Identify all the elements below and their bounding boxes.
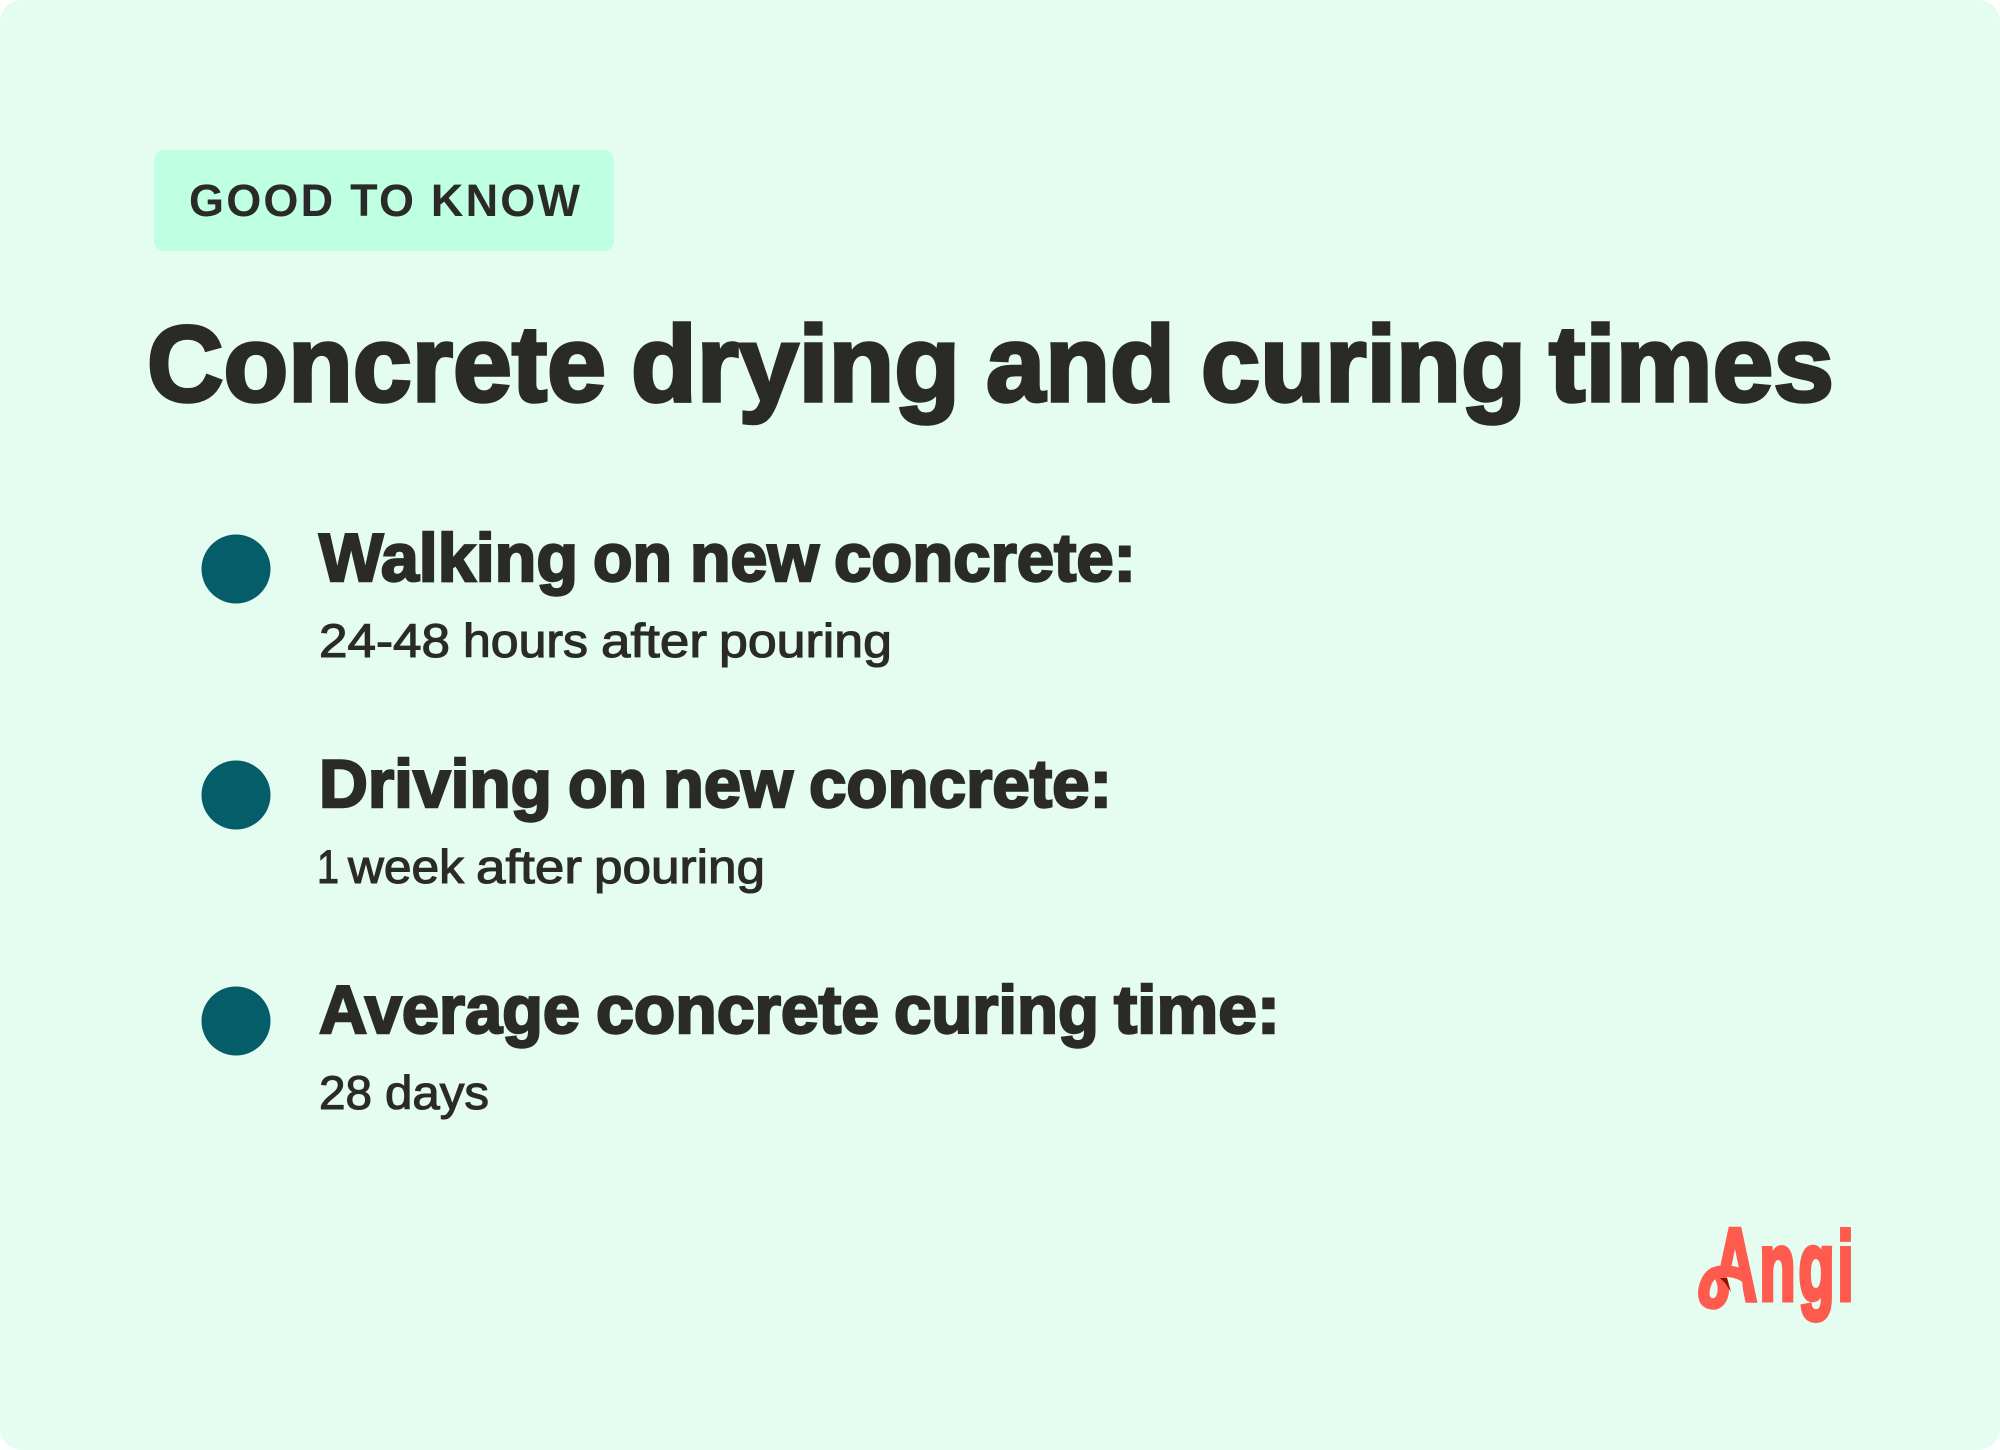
item heading: new bbox=[663, 746, 794, 822]
item detail: 28 bbox=[319, 1066, 372, 1119]
item heading: concrete bbox=[596, 972, 879, 1048]
item detail: hours bbox=[463, 614, 588, 667]
item detail: 1 bbox=[317, 840, 339, 893]
logo: Angi bbox=[1698, 1226, 1851, 1323]
title: curing bbox=[1201, 303, 1526, 424]
tag label: GOOD TO KNOW bbox=[189, 175, 581, 226]
item heading: curing bbox=[894, 972, 1099, 1048]
item heading: on bbox=[593, 520, 672, 596]
list item: walking bbox=[202, 520, 1136, 667]
item heading: new bbox=[690, 520, 820, 596]
item heading: time: bbox=[1114, 972, 1280, 1048]
item heading: Walking bbox=[319, 520, 578, 596]
item detail: pouring bbox=[719, 614, 892, 667]
item detail: pouring bbox=[594, 840, 765, 893]
item detail: days bbox=[385, 1066, 489, 1119]
list item: driving bbox=[202, 746, 1112, 893]
item heading: on bbox=[568, 746, 647, 822]
item detail: 24-48 bbox=[319, 614, 450, 667]
tag background bbox=[154, 150, 614, 251]
bullet bbox=[202, 534, 270, 604]
item detail: after bbox=[601, 614, 707, 667]
bullet bbox=[202, 986, 270, 1056]
logo letters ngi: n bbox=[1760, 1212, 1796, 1321]
logo letter A: A bbox=[1713, 1207, 1757, 1322]
tag: good to know bbox=[154, 150, 614, 251]
title: and bbox=[986, 303, 1175, 424]
item detail: after bbox=[476, 840, 582, 893]
title: times bbox=[1549, 303, 1834, 424]
title: drying bbox=[631, 303, 960, 424]
title: Concrete bbox=[147, 303, 606, 424]
list item: curing bbox=[202, 972, 1280, 1119]
item heading: concrete: bbox=[809, 746, 1112, 822]
logo fold bbox=[1720, 1278, 1731, 1292]
item detail: week bbox=[347, 840, 465, 893]
item heading: concrete: bbox=[834, 520, 1136, 596]
logo letters ngi: g bbox=[1798, 1212, 1834, 1321]
logo letters ngi: i bbox=[1838, 1212, 1854, 1321]
item heading: Average bbox=[319, 972, 580, 1048]
item heading: Driving bbox=[319, 746, 552, 822]
logo loop bbox=[1704, 1271, 1747, 1304]
bullet bbox=[202, 760, 270, 830]
